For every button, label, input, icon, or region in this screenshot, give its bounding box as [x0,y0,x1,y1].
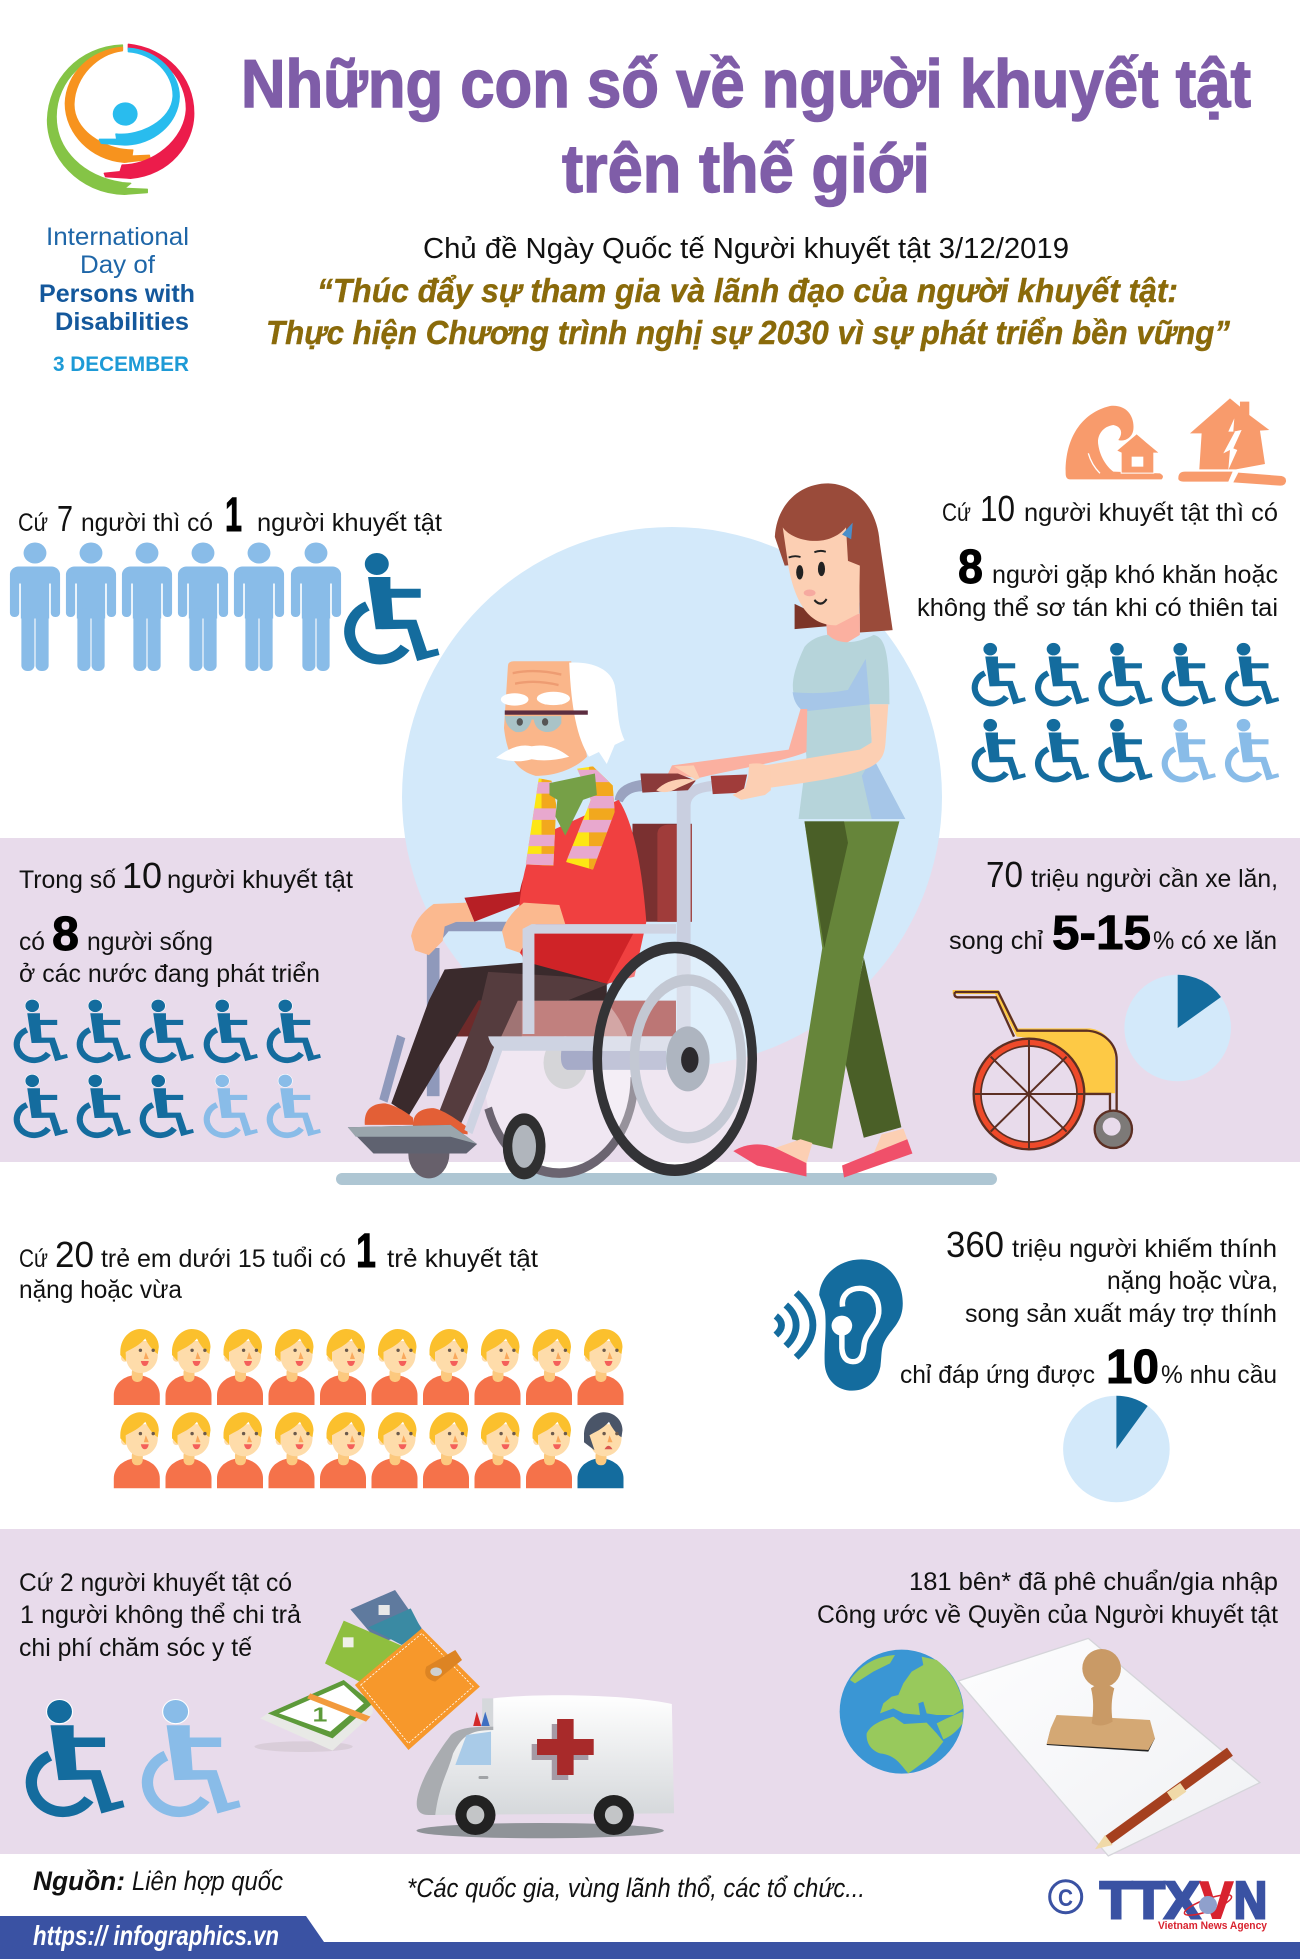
text: stat 4: triệu người cần xe lăn, [1031,865,1278,893]
text: stat 1: người khuyết tật [257,509,442,537]
footer bar with URL: https:// infographics.vn [33,1920,279,1951]
logo text: Persons with [39,280,195,308]
icons: ten wheelchairs, eight dark [975,643,1279,780]
text: stat 5: 20 [55,1234,94,1275]
text: stat 8: 181 bên* đã phê chuẩn/gia nhập [909,1568,1278,1596]
text: stat 4 [949,854,1278,960]
pie chart: 10 percent [1063,1396,1170,1502]
icon: wallet, cards and money: 1 [312,1705,327,1727]
text: stat 6: song sản xuất máy trợ thính [965,1300,1277,1328]
wheelchair frame and wheels [348,924,752,1178]
agency wordmark: Vietnam News Agency [1158,1920,1268,1932]
text: stat 1: người thì có [81,509,213,537]
text: stat 5: Cứ [19,1245,48,1273]
stat: hearing [776,1224,1278,1502]
icon: wallet, cards and money [254,1590,480,1752]
text: stat 3: Trong số [19,866,116,894]
logo text: 3 DECEMBER [53,353,189,376]
agency wordmark: TTX [1100,1872,1200,1930]
text: stat 4: 5-15 [1052,907,1151,960]
text: stat 3: có [19,928,45,956]
text: stat 2: 8 [958,541,983,594]
agency wordmark: V [1200,1872,1233,1930]
text: stat 5: nặng hoặc vừa [19,1276,182,1304]
agency wordmark: N [1234,1872,1267,1930]
text: stat 2: Cứ [942,499,971,527]
stat: medical costs [19,1569,674,1838]
text: stat 6: % nhu cầu [1161,1361,1277,1389]
logo text [39,223,195,376]
text: stat 4: song chỉ [949,927,1043,955]
icon: coloured ring of hands [48,44,194,194]
text: stat 4: % có xe lăn [1153,927,1277,955]
stat: wheelchairs needed [949,854,1278,1149]
icon: copyright: C [1058,1885,1073,1912]
subtitle and theme quote [266,233,1230,351]
text: stat 6: triệu người khiếm thính [1012,1235,1277,1263]
footer bar with URL [0,1916,1300,1959]
logo text: International [46,223,189,251]
text: stat 2 [917,488,1278,622]
text: stat 5: trẻ em dưới 15 tuổi có [101,1245,346,1273]
text: stat 6: 10 [1106,1341,1159,1394]
text: stat 3: người sống [87,928,213,956]
subtitle and theme quote: “Thúc đẩy sự tham gia và lãnh đạo của người khuyết tật: [317,272,1178,309]
icon: copyright [1050,1881,1082,1913]
text: stat 1 [18,489,442,542]
logo: TTXVN [1050,1872,1268,1932]
icons: six people [10,542,341,671]
text: stat 6: chỉ đáp ứng được [900,1361,1095,1389]
icons: two wheelchairs [31,1700,241,1813]
text: stat 2: không thể sơ tán khi có thiên tai [917,594,1278,622]
source [33,1866,283,1896]
text: stat 2: người khuyết tật thì có [1024,499,1278,527]
panel: band 2 background [0,838,1300,1162]
text: stat 2: người gặp khó khăn hoặc [992,561,1278,589]
text: stat 5: trẻ khuyết tật [387,1245,538,1273]
subtitle and theme quote: Chủ đề Ngày Quốc tế Người khuyết tật 3/12/2019 [423,233,1069,265]
text: stat 5: 1 [356,1225,376,1278]
title: trên thế giới [562,131,930,207]
text: stat 2: 10 [980,488,1015,529]
logo text: Day of [80,251,155,279]
icon: orange wheelchair [953,990,1132,1149]
ground bar [336,1173,997,1185]
text: stat 7: chi phí chăm sóc y tế [19,1634,252,1662]
text: stat 8: Công ước về Quyền của Người khuyết tật [817,1601,1278,1629]
footnote: *Các quốc gia, vùng lãnh thổ, các tổ chức... [407,1873,865,1903]
pie chart: 5-15 percent [1124,975,1231,1081]
text: stat 6: nặng hoặc vừa, [1107,1267,1278,1295]
illustration: paper, stamp and pen [958,1638,1260,1856]
text: stat 3: ở các nước đang phát triển [19,960,320,988]
text: stat 7: Cứ 2 người khuyết tật có [19,1569,292,1597]
icons: ten wheelchairs [17,999,321,1136]
stat: convention [817,1568,1278,1856]
woman [640,483,912,1177]
agency wordmark [1100,1872,1268,1932]
icons: twenty children [114,1329,624,1488]
stat: disasters [917,398,1286,780]
text: stat 1: 7 [57,498,73,539]
text: stat 8 [817,1568,1278,1629]
source: Nguồn: [33,1866,125,1896]
subtitle and theme quote: Thực hiện Chương trình nghị sự 2030 vì sự phát triển bền vững” [266,314,1230,351]
text: stat 4: 70 [986,854,1023,895]
icons: tsunami and earthquake [1066,398,1286,486]
man body [365,800,646,1134]
text: stat 6 [900,1224,1278,1394]
logo text: Disabilities [55,308,189,336]
text: stat 7: 1 người không thể chi trả [20,1601,301,1629]
icon: ear with sound waves [776,1259,903,1391]
icon: wheelchair user [350,552,439,661]
text: stat 6: 360 [946,1224,1004,1265]
text: stat 3: 8 [52,908,79,961]
text: stat 3: 10 [122,855,162,896]
text: stat 1: 1 [225,489,242,542]
central illustration background circle [402,527,942,1067]
source: Liên hợp quốc [132,1866,283,1896]
text: stat 5 [19,1225,538,1304]
illustration: woman pushing elderly man in wheelchair [348,483,912,1178]
man head [496,661,625,776]
stat: children [19,1225,624,1488]
text: stat 1: Cứ [18,509,48,537]
stat: developing countries [17,855,353,1136]
text: stat 3 [19,855,353,988]
panel: band 4 background [0,1529,1300,1854]
title [241,46,1251,207]
text: stat 7 [19,1569,301,1662]
icon: sad child [578,1412,624,1488]
illustration: globe [840,1650,964,1774]
man scarf [526,766,615,870]
stat: 1 in 7 people [10,489,442,671]
icon: ambulance [416,1695,674,1838]
wheelchair back and seat [427,780,712,1173]
text: stat 3: người khuyết tật [167,866,353,894]
logo: International Day of Persons with Disabilities [39,44,195,376]
